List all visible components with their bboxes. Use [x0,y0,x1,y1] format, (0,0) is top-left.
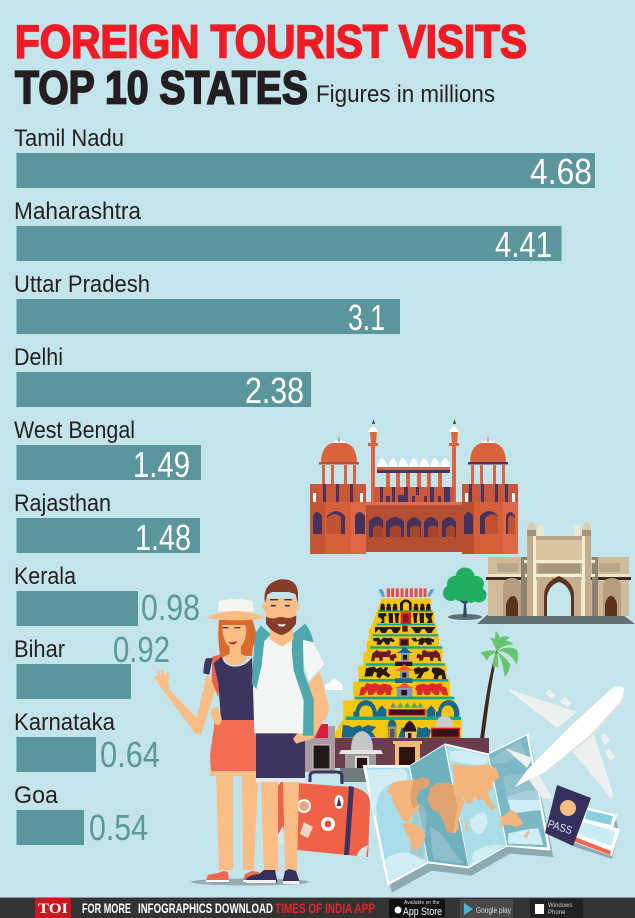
bar: Bihar: 0.92 [113,629,170,670]
water highlights [367,751,543,881]
illustration: tourist couple [153,579,329,886]
logo: TOI [35,898,71,918]
man upper body [252,579,329,744]
footer text: app name: TIMES OF INDIA APP [275,900,375,916]
bar: Goa: Goa [14,782,59,809]
continents [386,764,529,851]
man lower body [246,730,305,884]
crown [378,588,434,597]
bar: Tamil Nadu: Tamil Nadu [14,125,124,152]
domed pavilions [319,435,508,485]
illustration: temple gopuram [334,588,462,738]
bar: Delhi [14,344,311,411]
illustration: palm tree [480,631,518,739]
illustration: temple base and shrines [305,724,489,782]
illustration: tickets [572,807,620,859]
right tower [462,484,518,554]
red figures [359,683,448,696]
badge: Google play: Google play [476,906,511,915]
bar: Kerala: Kerala [14,563,77,590]
ground shadow [191,878,309,886]
bar: West Bengal [14,417,201,485]
minarets [368,419,459,502]
bar: Maharashtra [14,198,562,265]
base tier [342,725,431,738]
title: Figures in millions [316,81,495,108]
center tower [394,612,414,697]
illustration: passport: PASS [546,818,574,837]
illustration: Gateway of India [477,521,635,624]
footer text: INFOGRAPHICS DOWNLOAD [138,900,273,916]
bar: West Bengal: West Bengal [14,417,135,444]
illustration: small cloud [325,679,343,690]
title: TOP 10 STATES [15,62,308,114]
bar: Goa [14,782,148,848]
teal bands [346,610,461,720]
badge: App Store: App Store [403,906,442,918]
footer [0,897,635,918]
hall with white domes [374,458,454,503]
bar: Maharashtra: Maharashtra [14,198,142,225]
badge: App Store: Available on the [404,900,440,906]
bar: Rajasthan: 1.48 [135,517,191,558]
illustration: tree [443,568,486,620]
illustration: Red Fort [310,419,518,554]
bar: Kerala: 0.98 [141,587,200,628]
map border [363,733,551,886]
bar: Delhi: 2.38 [245,370,304,411]
bar: West Bengal: 1.49 [133,444,190,485]
illustration: folded world map [363,733,553,893]
bar: Uttar Pradesh: 3.1 [348,297,385,338]
footer text: FOR MORE [82,900,131,916]
maroon animals [371,650,441,661]
footer text [82,900,273,916]
title: FOREIGN TOURIST VISITS [15,16,527,68]
badge: Windows Phone [530,899,583,918]
title [15,16,527,114]
bar: Uttar Pradesh [14,271,400,338]
badge: Windows Phone: Phone [548,910,566,916]
left tower [310,484,366,554]
carved figures [364,599,446,679]
illustration: passport [545,785,591,846]
badge: App Store [389,899,445,918]
woman upper body [203,599,265,725]
bar: Karnataka [14,709,160,775]
temple body [334,598,462,738]
woman lower body [153,670,259,882]
bar: Karnataka: 0.64 [100,734,160,775]
bar: Karnataka: Karnataka [14,709,116,736]
map panels [366,736,547,882]
bar: Rajasthan: Rajasthan [14,490,111,517]
illustration: suitcase [275,772,370,857]
logo: TOI: TOI [38,901,68,917]
bar: Bihar: Bihar [14,636,65,663]
illustration: airplane [505,686,624,800]
bar: Rajasthan [14,490,200,558]
bar: Tamil Nadu: 4.68 [530,151,592,192]
arches tier [353,700,459,717]
badge: Windows Phone: Windows [548,903,572,909]
bar: Bihar [14,629,170,699]
bar: Tamil Nadu [14,125,595,192]
central wall [366,502,463,552]
bar: Delhi: Delhi [14,344,63,371]
bar: Goa: 0.54 [89,807,148,848]
bar: Kerala [14,563,200,628]
map shadow [367,740,553,893]
bar: Maharashtra: 4.41 [495,224,552,265]
bar: Uttar Pradesh: Uttar Pradesh [14,271,150,298]
badge: Google play [460,899,513,918]
